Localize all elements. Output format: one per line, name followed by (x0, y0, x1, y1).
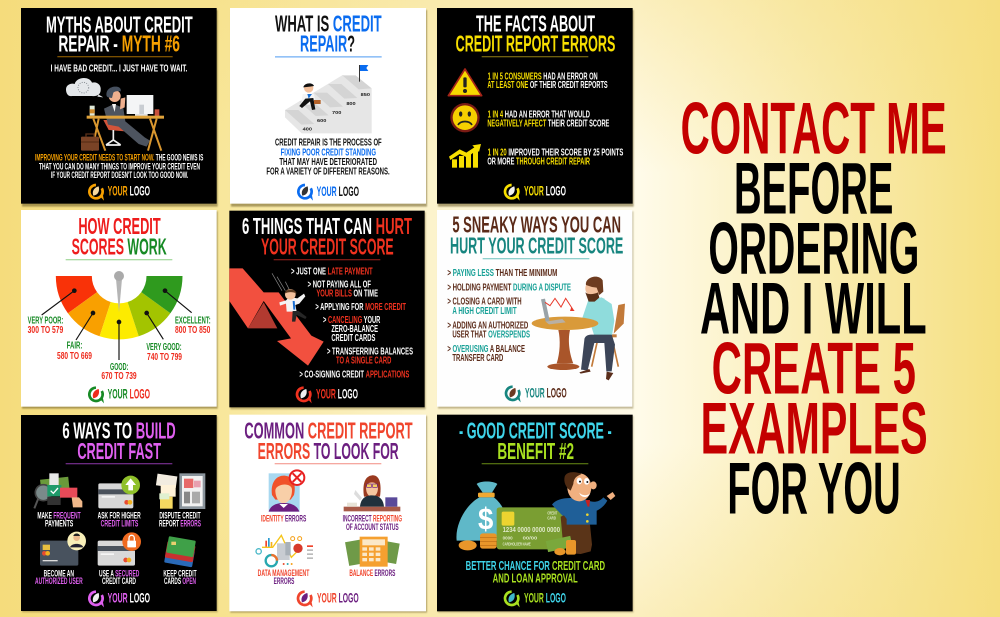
icon: secured card (98, 532, 141, 566)
list of six things: CREDIT CARDS (331, 333, 375, 344)
illustration: credit score stairs: 600 (317, 118, 327, 124)
list of six things: TO A SINGLE CARD (336, 356, 392, 367)
gauge chart (42, 271, 192, 360)
panel title: COMMON CREDIT REPORT (244, 417, 413, 443)
illustration: money bag, card and businessman: 00/00 (523, 535, 538, 540)
label: very poor (28, 315, 64, 336)
logo: YOUR LOGO (524, 184, 566, 199)
label: very poor: 300 TO 579 (28, 325, 64, 336)
body text: THAT MAY HAVE DETERIORATED (279, 157, 377, 168)
logo (295, 385, 358, 403)
illustration: credit score stairs: 400 (303, 127, 312, 133)
panel title: REPAIR - MYTH #6 (58, 31, 180, 57)
list of five ways: A HIGH CREDIT LIMIT (452, 306, 517, 317)
benefit text: AND LOAN APPROVAL (493, 571, 578, 585)
logo: YOUR LOGO (108, 184, 150, 199)
illustration: money bag, card and businessman: CARD (547, 515, 556, 520)
panel: how credit scores work (21, 210, 218, 409)
illustration: worried man at table (532, 277, 625, 380)
caption: data management errors: ERRORS (274, 576, 294, 586)
panel title: HOW CREDIT (78, 213, 161, 239)
caption: become an authorized user: AUTHORIZED USER (35, 576, 83, 586)
illustration: falling arrow and man (229, 268, 324, 366)
caption: keep credit cards open (163, 568, 197, 586)
body text: IMPROVING YOUR CREDIT NEEDS TO START NOW. THE GOOD NEWS IS (35, 153, 203, 163)
list of six things (291, 266, 413, 380)
icon: credit reports (156, 473, 205, 509)
caption: keep credit cards open: KEEP CREDIT (163, 568, 197, 578)
illustration: money bag, card and businessman: $ (478, 502, 493, 536)
illustration: credit score stairs: 850 (361, 92, 370, 98)
icon: incorrect reporting (344, 475, 400, 511)
panel title: 5 SNEAKY WAYS YOU CAN (452, 212, 621, 238)
list of six things: > APPLYING FOR MORE CREDIT (315, 302, 406, 313)
logo (296, 183, 359, 201)
label: very poor: VERY POOR: (28, 315, 63, 326)
panel: things that hurt your credit score (229, 211, 426, 409)
panel title: SCORES WORK (72, 233, 167, 259)
icon: rising chart (449, 144, 481, 168)
facts row 2 (487, 109, 609, 129)
caption: use a secured credit card (99, 568, 140, 586)
panel title: CREDIT REPORT ERRORS (456, 31, 615, 57)
panel: ways to build credit fast (21, 415, 218, 612)
panel title (72, 213, 167, 259)
panel: facts about credit report errors (437, 8, 634, 207)
list of five ways: > CLOSING A CARD WITH (447, 297, 522, 308)
logo (296, 589, 359, 607)
logo (503, 589, 566, 607)
panel title (242, 213, 412, 259)
illustration: money bag, card and businessman: 1234 0000 0000 0000 (503, 527, 560, 534)
illustration: money bag, card and businessman: CREDIT (547, 510, 557, 515)
panel title: WHAT IS CREDIT (275, 11, 382, 37)
caption: dispute credit report errors: REPORT ERRORS (159, 519, 201, 529)
benefit text: BETTER CHANCE FOR CREDIT CARD (466, 559, 605, 573)
body text: FIXING POOR CREDIT STANDING (281, 147, 376, 158)
panel title (62, 417, 176, 464)
panel title (275, 11, 382, 57)
panel: good credit score benefit (437, 415, 634, 613)
panel title (46, 11, 193, 57)
icon: data management (256, 535, 313, 566)
label: fair (57, 340, 92, 362)
caption: ask for higher credit limits: CREDIT LIMITS (101, 519, 138, 529)
list of five ways: USER THAT OVERSPENDS (452, 330, 530, 341)
caption: make frequent payments (37, 511, 81, 529)
label: fair: FAIR: (67, 340, 82, 351)
label: good (101, 362, 137, 382)
label: good: 670 TO 739 (101, 371, 137, 382)
logo (87, 589, 150, 607)
facts row 1 (487, 71, 608, 91)
icon: card with up arrow (98, 476, 140, 508)
caption: incorrect reporting: INCORRECT REPORTING (343, 513, 402, 523)
list of six things: > NOT PAYING ALL OF (308, 279, 371, 290)
caption: data management errors: DATA MANAGEMENT (258, 568, 310, 578)
facts row 2: NEGATIVELY AFFECT THEIR CREDIT SCORE (487, 118, 609, 129)
facts row 1: 1 IN 5 CONSUMERS HAD AN ERROR ON (488, 71, 598, 82)
panel title (456, 11, 615, 57)
caption: dispute credit report errors: DISPUTE CREDIT (159, 511, 201, 521)
panel: what is credit repair (230, 8, 427, 207)
label: fair: 580 TO 669 (57, 351, 92, 362)
caption: become an authorized user (35, 568, 83, 586)
list of five ways: > OVERUSING A BALANCE (447, 344, 525, 355)
icon: warning triangle (448, 69, 482, 96)
illustration: credit score stairs: 800 (346, 101, 356, 107)
panel title: 6 THINGS THAT CAN HURT (242, 213, 412, 239)
logo: YOUR LOGO (108, 591, 150, 606)
logo: YOUR LOGO (525, 386, 567, 401)
icon: calculator and cash (345, 537, 400, 567)
illustration: credit score stairs: 700 (332, 110, 342, 116)
facts row 3: OR MORE THROUGH CREDIT REPAIR (487, 157, 590, 168)
list of five ways: > HOLDING PAYMENT DURING A DISPUTE (447, 282, 571, 293)
caption: make frequent payments: MAKE FREQUENT (37, 511, 81, 521)
subheading: I HAVE BAD CREDIT... I JUST HAVE TO WAIT. (51, 63, 187, 74)
illustration: man at desk (66, 78, 164, 151)
logo (503, 183, 566, 201)
caption: use a secured credit card: USE A SECURED (99, 568, 140, 578)
caption: use a secured credit card: CREDIT CARD (102, 576, 136, 586)
panel title: BENEFIT #2 (497, 438, 574, 464)
caption: identity errors: IDENTITY ERRORS (261, 514, 306, 524)
panel: common credit report errors (229, 415, 427, 613)
logo: YOUR LOGO (316, 386, 358, 401)
caption: ask for higher credit limits: ASK FOR HIGHER (98, 511, 141, 521)
panel title: HURT YOUR CREDIT SCORE (450, 233, 623, 259)
logo: YOUR LOGO (317, 591, 359, 606)
list of six things: > TRANSFERRING BALANCES (327, 346, 413, 357)
illustration: money bag, card and businessman: CARDHOLDER NAME (503, 542, 531, 547)
list of five ways: > ADDING AN AUTHORIZED (447, 321, 529, 332)
body text: FOR A VARIETY OF DIFFERENT REASONS. (266, 167, 390, 178)
caption: ask for higher credit limits (98, 511, 141, 529)
icon: frequent payments (34, 473, 82, 508)
panel title: REPAIR? (300, 31, 355, 57)
logo: YOUR LOGO (524, 591, 566, 606)
body text (266, 138, 390, 178)
panel title: MYTHS ABOUT CREDIT (46, 11, 193, 37)
body text: THAT YOU CAN DO MANY THINGS TO IMPROVE YOUR CREDIT EVEN (39, 161, 200, 171)
illustration: money bag, card and businessman (456, 472, 615, 555)
list of six things: > CO-SIGNING CREDIT APPLICATIONS (299, 369, 409, 380)
label: very good: VERY GOOD: (146, 342, 182, 353)
panel: myths about credit repair (21, 8, 218, 207)
label: excellent: 800 TO 850 (175, 325, 210, 336)
body text: CREDIT REPAIR IS THE PROCESS OF (275, 138, 382, 149)
panel title: YOUR CREDIT SCORE (261, 233, 394, 259)
icon: sad face (450, 103, 480, 132)
panel title: 6 WAYS TO BUILD (62, 417, 176, 443)
panel title: - GOOD CREDIT SCORE - (459, 417, 612, 443)
facts row 2: 1 IN 4 HAD AN ERROR THAT WOULD (488, 109, 590, 120)
label: very good (146, 342, 182, 363)
caption: dispute credit report errors (159, 511, 201, 529)
list of six things: > JUST ONE LATE PAYMENT (291, 266, 373, 277)
label: good: GOOD: (110, 362, 128, 373)
logo (504, 384, 567, 402)
logo: YOUR LOGO (317, 184, 359, 199)
caption: make frequent payments: PAYMENTS (45, 519, 73, 529)
label: excellent (175, 315, 211, 336)
logo (87, 385, 150, 403)
list of five ways (447, 268, 571, 364)
benefit text (466, 559, 605, 585)
list of six things: YOUR BILLS ON TIME (316, 289, 378, 300)
facts row 3: 1 IN 20 IMPROVED THEIR SCORE BY 25 POINTS (488, 147, 623, 158)
icon: credit cards stack (164, 536, 196, 567)
panel title: THE FACTS ABOUT (476, 11, 595, 37)
caption: become an authorized user: BECOME AN (44, 568, 74, 578)
panel title (450, 212, 623, 259)
illustration: money bag, card and businessman: 0000 (503, 535, 513, 540)
panel title: ERRORS TO LOOK FOR (258, 438, 399, 464)
body text: IF YOUR CREDIT REPORT DOESN'T LOOK TOO GOOD NOW. (51, 170, 188, 180)
panel title (244, 417, 413, 464)
icon: identity error (269, 470, 304, 512)
facts row 3 (487, 147, 623, 168)
caption: data management errors (258, 568, 310, 586)
icon: authorized user card (40, 532, 86, 566)
facts row 1: AT LEAST ONE OF THEIR CREDIT REPORTS (487, 80, 608, 91)
list of six things: ZERO-BALANCE (331, 324, 378, 335)
call to action headline (681, 86, 947, 529)
caption: keep credit cards open: CARDS OPEN (164, 576, 196, 586)
illustration: credit score stairs (285, 65, 372, 133)
body text (35, 153, 203, 180)
panel: sneaky ways to hurt your credit score (437, 210, 633, 409)
list of six things: > CANCELING YOUR (323, 315, 381, 326)
list of five ways: > PAYING LESS THAN THE MINIMUM (447, 268, 557, 279)
label: very good: 740 TO 799 (147, 352, 182, 363)
caption: incorrect reporting (343, 513, 402, 532)
caption: incorrect reporting: OF ACCOUNT STATUS (346, 522, 399, 532)
label: excellent: EXCELLENT: (175, 315, 211, 326)
panel title: CREDIT FAST (77, 438, 161, 464)
caption: balance errors: BALANCE ERRORS (349, 568, 395, 578)
logo (87, 183, 150, 201)
panel title (459, 417, 612, 464)
list of five ways: TRANSFER CARD (452, 353, 504, 364)
logo: YOUR LOGO (108, 386, 150, 401)
